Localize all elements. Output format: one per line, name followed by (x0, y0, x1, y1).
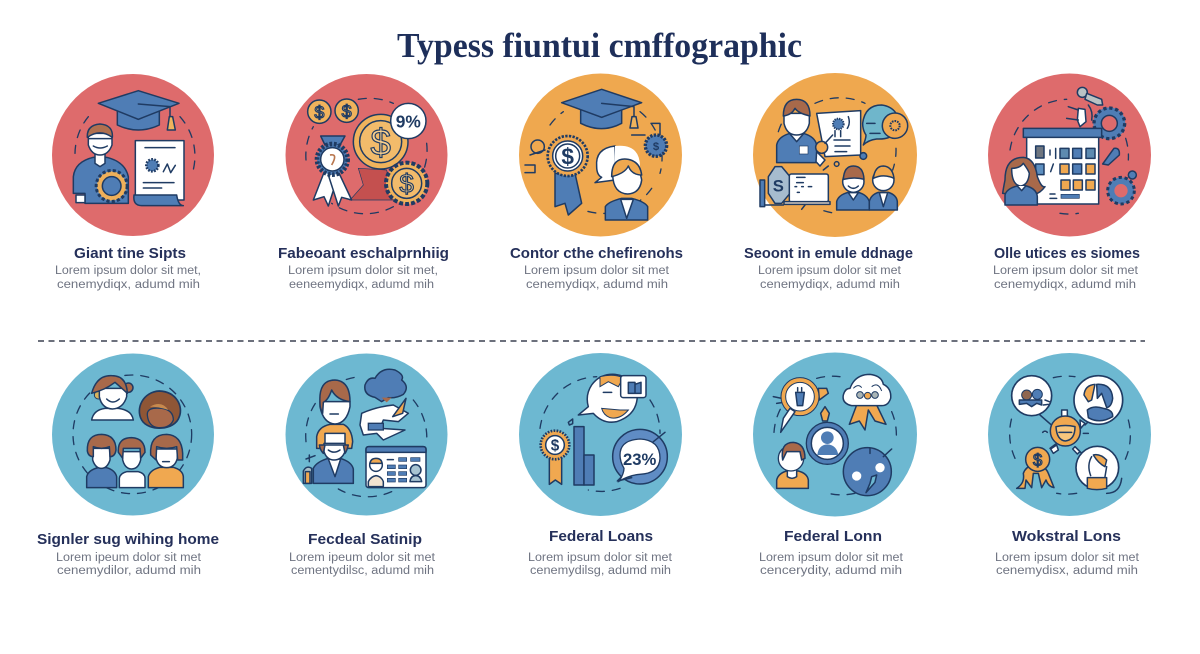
description 9: Lorem ipsum dolor sit met (759, 552, 904, 564)
description 4: Lorem ipsum dolor sit met (758, 265, 902, 277)
circle background 4 (753, 73, 917, 237)
title: Typess fiuntui cmffographic (397, 26, 802, 65)
panel: second online damage (744, 73, 917, 291)
description 5 (993, 265, 1139, 291)
circle background 5 (988, 74, 1151, 236)
panel: federal loans (519, 353, 682, 577)
description 9: cencerydity, adumd mih (760, 565, 902, 577)
circle background 3 (519, 74, 682, 236)
icon: teacher, document and students: S (773, 177, 784, 196)
icon: coins, medal and percent: $ (342, 101, 352, 121)
panel: federal loan (753, 352, 917, 577)
heading 7: Fecdeal Satinip (308, 531, 422, 548)
description 9 (759, 552, 904, 577)
description 6: Lorem ipeum dolor sit met (56, 552, 202, 564)
description 4 (758, 265, 902, 291)
heading 5: Olle utices es siomes (994, 245, 1140, 262)
description 8: Lorem ipsum dolor sit met (528, 552, 673, 564)
description 10: cenemydisx, adumd mih (996, 565, 1138, 577)
icon: network of people and cloud (773, 374, 896, 496)
icon: coins, medal and percent: $ (399, 169, 414, 199)
panel: contact the chefs (510, 74, 683, 291)
description 3: Lorem ipsum dolor sit met (524, 265, 670, 277)
circle background 8 (519, 353, 682, 516)
description 8: cenemydilsg, adumd mih (530, 565, 671, 577)
description 8 (528, 552, 673, 577)
heading 3: Contor cthe chefirenohs (510, 245, 683, 262)
icon: office building, gears and woman (1003, 87, 1136, 214)
description 3: cenemydiqx, adumd mih (526, 279, 668, 291)
panel: grant tips (52, 74, 214, 291)
heading 9: Federal Lonn (784, 528, 882, 545)
icon: students, cloud and calendar (303, 369, 427, 497)
description 7 (289, 552, 436, 577)
heading 4: Seoont in emule ddnage (744, 245, 913, 262)
panel: signing home (37, 354, 219, 577)
circle background 2 (286, 74, 448, 236)
description 10: Lorem ipsum dolor sit met (995, 552, 1140, 564)
description 10 (995, 552, 1140, 577)
panel: fabricant scholarship (278, 74, 449, 291)
description 4: cenemydiqx, adumd mih (760, 279, 900, 291)
icon: connected people and coin (1010, 376, 1130, 494)
description 1: Lorem ipsum dolor sit met, (55, 265, 201, 277)
icon: chart, speech bubbles and badge: 23% (623, 450, 657, 469)
heading 10: Wokstral Lons (1012, 528, 1121, 545)
panel: federal satinip (286, 354, 448, 577)
icon: graduate with diploma (73, 91, 195, 206)
icon: chart, speech bubbles and badge: $ (551, 438, 560, 455)
heading 8: Federal Loans (549, 528, 653, 545)
circle background 6 (52, 354, 214, 516)
circle background 7 (286, 354, 448, 516)
panel: workstral loans (988, 353, 1151, 577)
circle background 9 (753, 352, 917, 516)
description 5: Lorem ipsum dolor sit met (993, 265, 1139, 277)
description 1: cenemydiqx, adumd mih (57, 279, 200, 291)
panel: online utilities (988, 74, 1151, 291)
icon: connected people and coin: $ (1033, 450, 1042, 469)
circle background 1 (52, 74, 214, 236)
description 2: eeneemydiqx, adumd mih (289, 279, 434, 291)
circle background 10 (988, 353, 1151, 516)
description 6 (56, 552, 202, 577)
heading 2: Fabeoant eschalprnhiig (278, 245, 449, 262)
icon: cap, rosette and student (525, 89, 667, 220)
description 2 (288, 265, 438, 291)
icon: coins, medal and percent: $ (314, 102, 324, 122)
icon: teacher, document and students (760, 98, 908, 213)
heading 6: Signler sug wihing home (37, 531, 219, 548)
description 2: Lorem ipsum dolor sit met, (288, 265, 438, 277)
icon: coins, medal and percent: $ (370, 122, 391, 163)
description 5: cenemydiqx, adumd mih (994, 279, 1136, 291)
icon: chart, speech bubbles and badge (540, 374, 667, 491)
icon: coins, medal and percent: 9% (396, 112, 421, 132)
icon: group of people (73, 375, 192, 494)
description 1 (55, 265, 201, 291)
description 6: cenemydilor, adumd mih (57, 565, 201, 577)
description 3 (524, 265, 670, 291)
icon: coins, medal and percent (306, 98, 427, 214)
icon: cap, rosette and student: $ (561, 143, 574, 169)
description 7: Lorem ipeum dolor sit met (289, 552, 436, 564)
heading 1: Giant tine Sipts (74, 245, 186, 262)
description 7: cementydilsc, adumd mih (291, 565, 434, 577)
icon: cap, rosette and student: $ (653, 141, 660, 153)
